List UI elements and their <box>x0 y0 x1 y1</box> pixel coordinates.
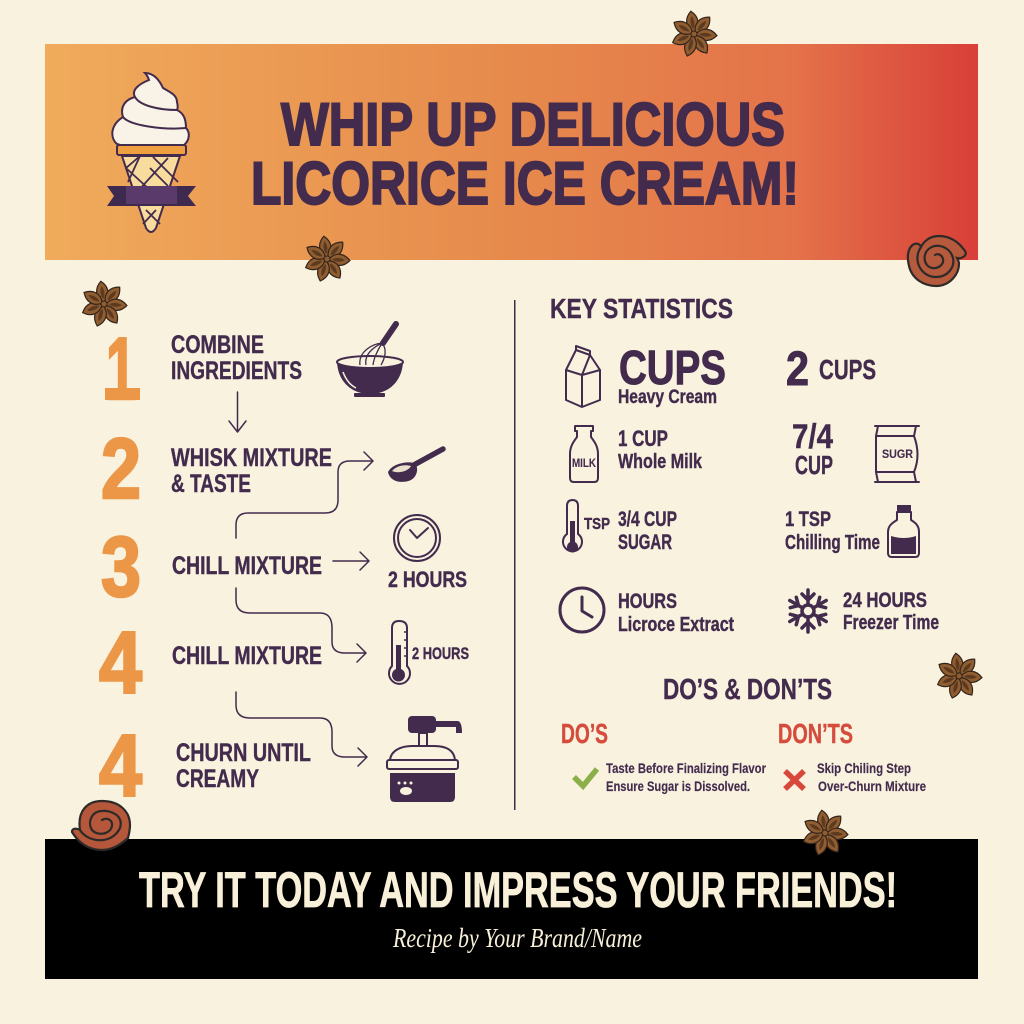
stat: sugar: 3/4 CUP <box>618 508 677 531</box>
don'ts heading: DON’TS <box>778 718 853 749</box>
don'ts list: Over-Churn Mixture <box>818 778 926 794</box>
TSP label: TSP <box>584 516 610 533</box>
decoration: star anise footer <box>802 809 848 857</box>
icon: thermometer <box>389 621 410 684</box>
stat: cups heavy cream <box>618 342 726 408</box>
thermometer label: 2 HOURS <box>412 644 469 663</box>
stat: cups heavy cream: Heavy Cream <box>618 387 717 408</box>
icon: ice cream cone <box>107 73 196 232</box>
step 5 label: CREAMY <box>176 765 259 793</box>
title: LICORICE ICE CREAM! <box>251 150 799 217</box>
divider <box>514 300 516 810</box>
stat: chilling time: Chilling Time <box>785 532 880 554</box>
step 1 number: 1 <box>106 319 136 418</box>
stat: sugar <box>618 508 677 554</box>
stat: chilling time <box>785 508 880 554</box>
icon: bowl and whisk <box>337 324 403 397</box>
stat: licorice extract: Licroce Extract <box>618 614 734 636</box>
step 1 label: INGREDIENTS <box>171 357 302 385</box>
stat: 2 cups <box>786 343 876 396</box>
step 1 number <box>105 319 140 418</box>
stat: 2 cups: CUPS <box>819 354 876 385</box>
arrow: to thermometer <box>236 588 366 662</box>
heading: do's and don'ts: DO’S & DON’TS <box>663 674 832 706</box>
stat: licorice extract <box>618 590 734 636</box>
step 4 label: CHILL MIXTURE <box>172 642 322 670</box>
panel: left process steps <box>99 319 469 815</box>
decoration: star anise header <box>304 235 350 283</box>
stat: sugar: SUGAR <box>618 531 672 554</box>
step 5 number: 4 <box>99 716 142 815</box>
stat: cups heavy cream: CUPS <box>619 342 726 395</box>
panel: footer banner <box>45 839 978 979</box>
stat: freezer time <box>843 589 939 634</box>
step 1 label: COMBINE <box>171 331 264 359</box>
step 4 number: 4 <box>99 613 142 712</box>
footer credit: Recipe by Your Brand/Name <box>392 923 642 953</box>
panel: header banner <box>45 44 978 260</box>
panel: do's and don'ts <box>561 674 926 794</box>
icon: ice cream machine <box>387 716 462 802</box>
icon: snowflake <box>787 590 829 632</box>
icon: extract bottle <box>888 505 919 557</box>
icon: clock <box>394 515 440 561</box>
icon: clock outline <box>560 588 604 632</box>
stat: whole milk <box>618 426 703 473</box>
stat: whole milk: 1 CUP <box>618 426 668 451</box>
arrow: to churn machine <box>236 692 367 766</box>
icon: spoon <box>388 449 443 482</box>
stat: chilling time: 1 TSP <box>785 508 831 531</box>
decoration: star anise right <box>936 652 982 700</box>
title <box>251 91 799 217</box>
stat: 7/4 cup: CUP <box>795 450 833 480</box>
icon: milk bottle: MILK <box>572 458 597 470</box>
stat: 7/4 cup: 7/4 <box>792 418 833 456</box>
stat: licorice extract: HOURS <box>618 590 677 613</box>
icon: check mark <box>574 769 597 786</box>
decoration: licorice spiral right <box>908 236 966 286</box>
step 2 label: WHISK MIXTURE <box>171 444 332 472</box>
clock label: 2 HOURS <box>388 567 467 592</box>
step 2 label: & TASTE <box>171 470 251 498</box>
icon: sugar bag <box>875 426 919 482</box>
icon: milk carton <box>566 346 600 407</box>
decoration: star anise left <box>81 280 127 328</box>
stat: 7/4 cup <box>792 418 833 480</box>
step 3 label: CHILL MIXTURE <box>172 552 322 580</box>
panel: key statistics <box>550 293 939 636</box>
decoration: star anise top <box>671 10 717 58</box>
icon: cross mark <box>785 771 804 789</box>
icon: thermometer small <box>563 500 582 552</box>
do's list: Taste Before Finalizing Flavor <box>606 760 766 776</box>
stat: 2 cups: 2 <box>786 343 809 396</box>
arrow: to spoon <box>236 452 373 538</box>
do's heading: DO’S <box>561 718 608 749</box>
icon: milk bottle <box>570 426 598 482</box>
step 3 number: 3 <box>101 520 141 615</box>
heading: key statistics: KEY STATISTICS <box>550 293 733 324</box>
decoration: licorice spiral left <box>72 801 130 850</box>
do's list: Ensure Sugar is Dissolved. <box>606 778 750 794</box>
stat: freezer time: Freezer Time <box>843 612 939 634</box>
icon: sugar bag: SUGR <box>882 449 914 461</box>
don'ts list: Skip Chiling Step <box>817 760 911 776</box>
step 5 label: CHURN UNTIL <box>176 739 311 767</box>
arrow: step 1 to 2 <box>229 392 246 432</box>
step 2 number: 2 <box>101 422 141 517</box>
stat: whole milk: Whole Milk <box>618 451 703 473</box>
arrow: to clock <box>333 552 369 570</box>
stat: freezer time: 24 HOURS <box>843 589 927 612</box>
title: WHIP UP DELICIOUS <box>281 91 785 158</box>
